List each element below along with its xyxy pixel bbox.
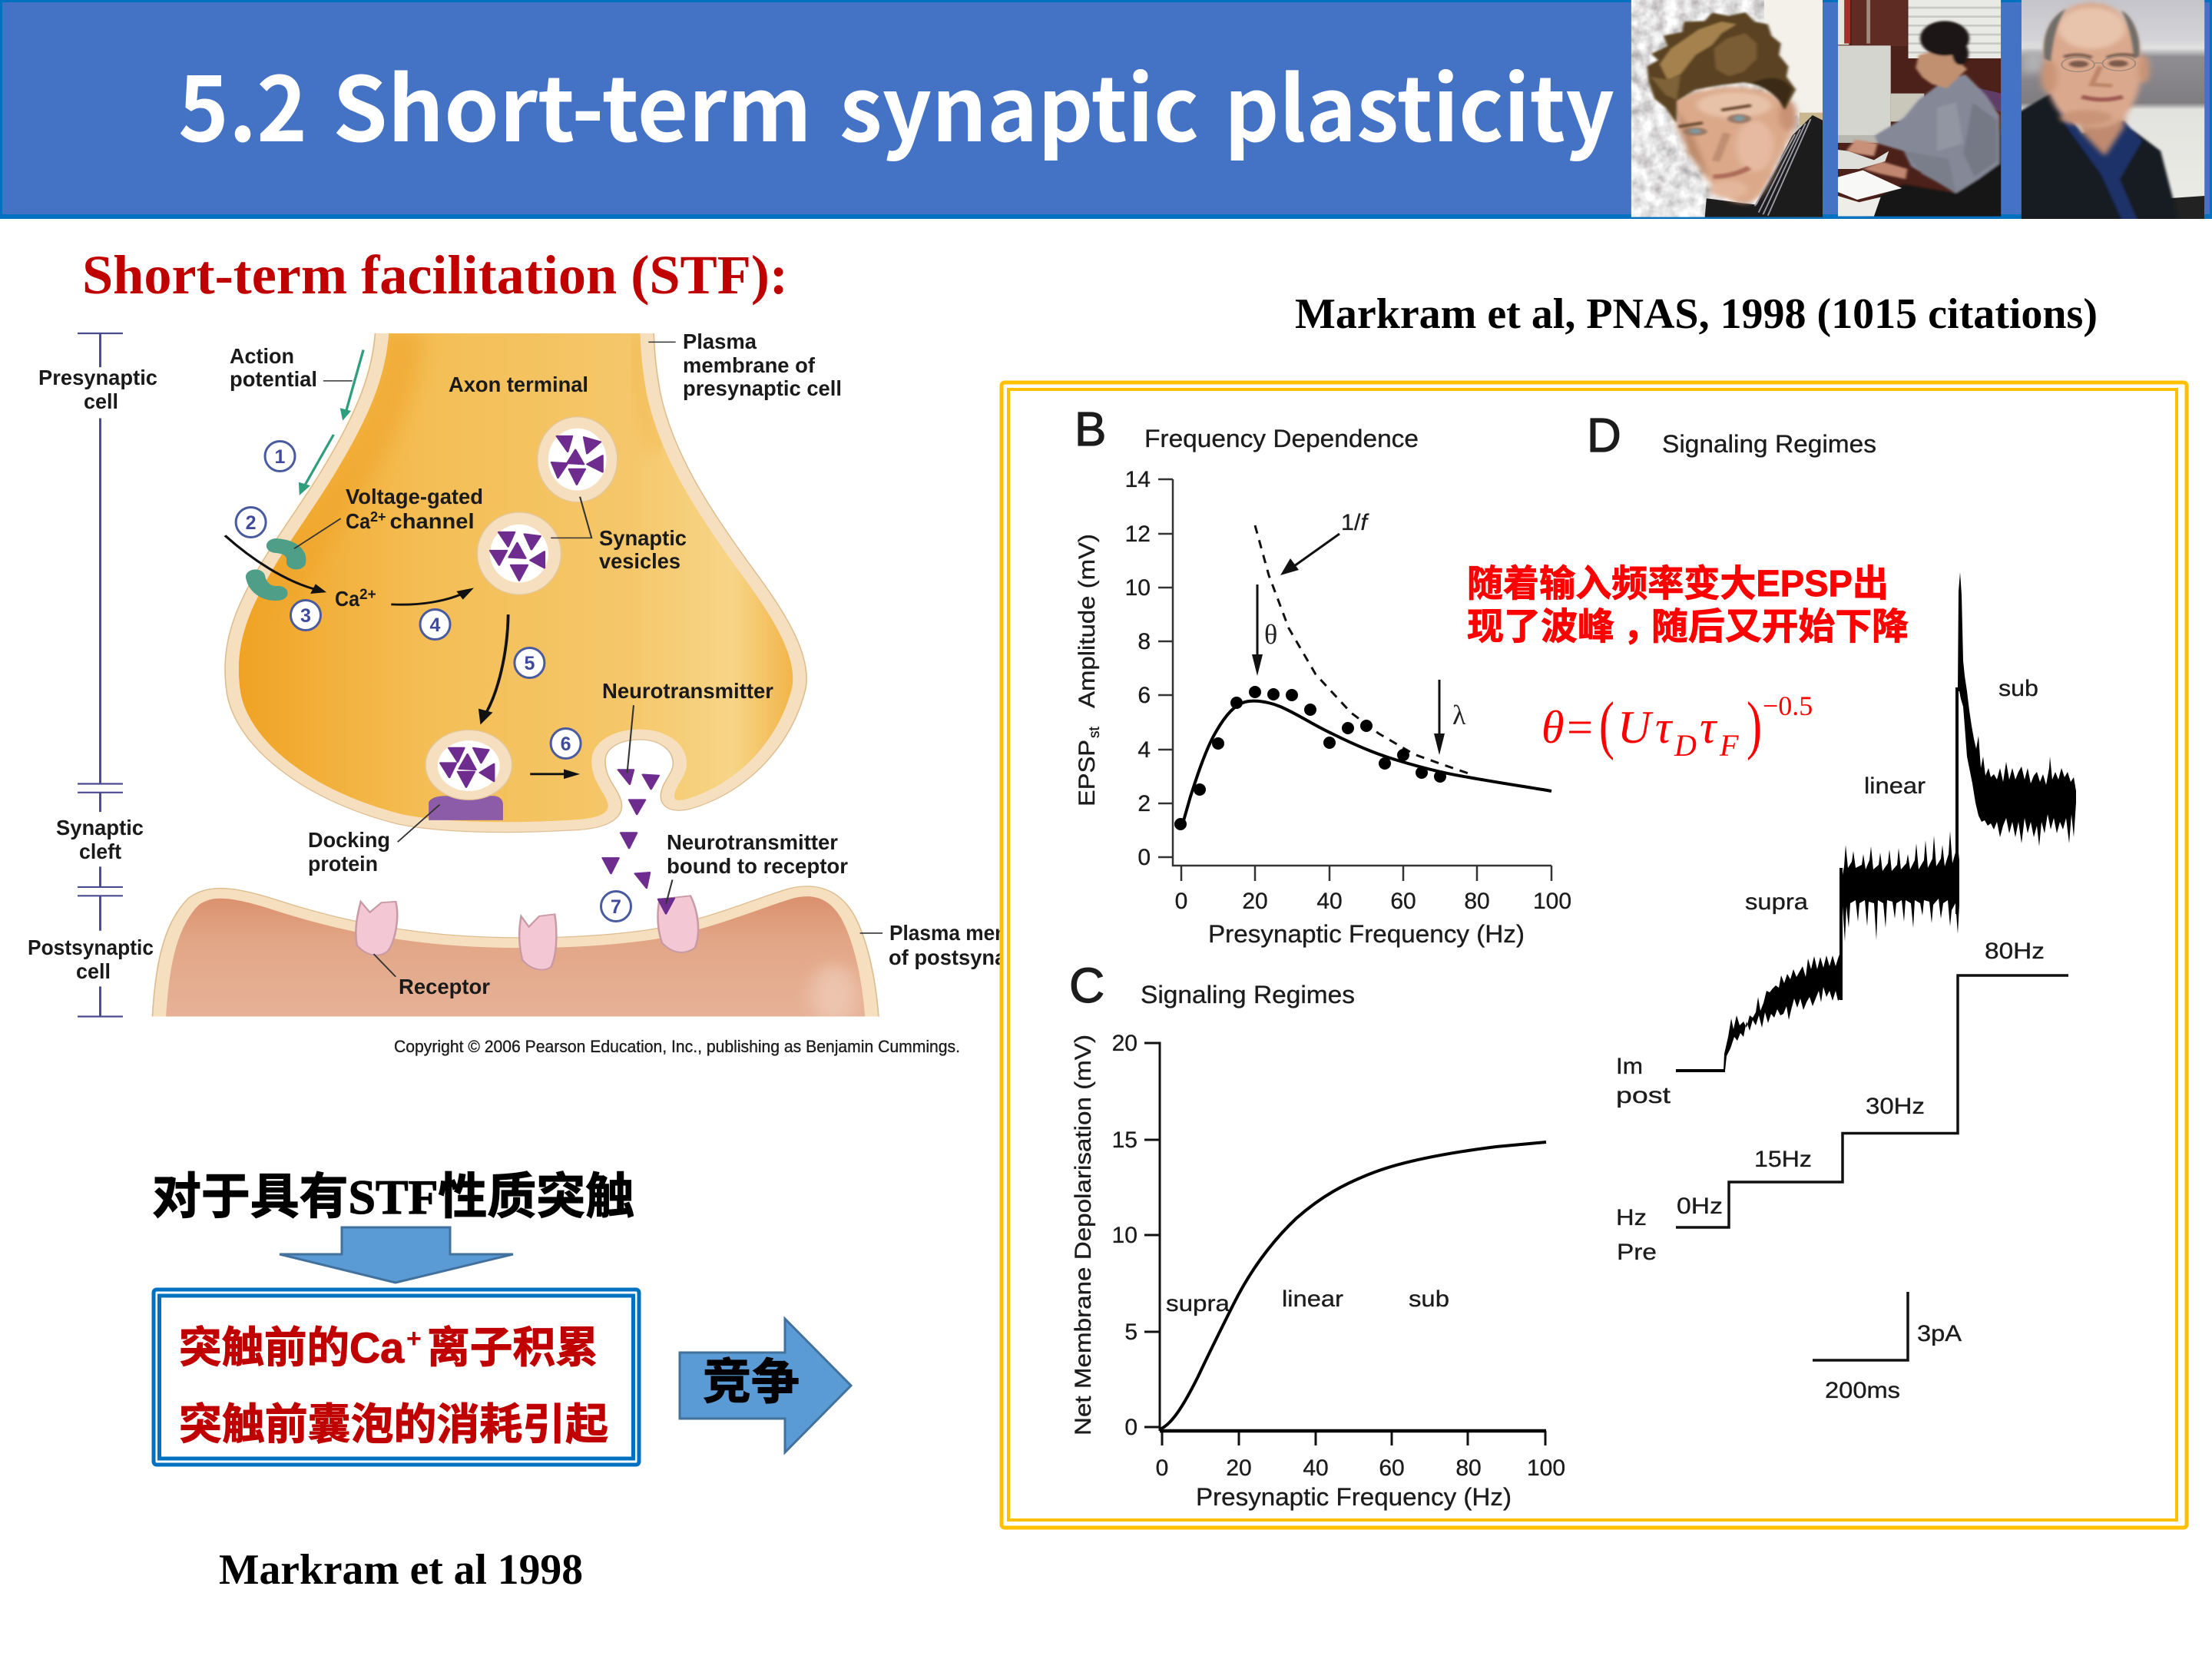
formula: D [1674, 728, 1697, 763]
label: of postsynaptic cell: of postsynaptic cell [889, 945, 1084, 969]
chart C: signaling regimes [1069, 958, 1565, 1511]
chart title: Signaling Regimes [1141, 981, 1355, 1008]
trace labels: Hz [1616, 1205, 1647, 1230]
trace labels [1616, 1054, 1671, 1265]
lambda label: λ [1452, 700, 1466, 730]
y tick labels: 8 [1137, 629, 1151, 654]
y tick labels [1125, 467, 1151, 870]
label: action: Action [230, 344, 294, 368]
label: postsynaptic: Postsynaptic [28, 935, 154, 959]
regime labels: sub [1998, 676, 2038, 701]
regime labels: linear [1282, 1286, 1343, 1312]
label: synaptic: Synaptic [599, 526, 687, 550]
text: vesicle depletion: 突触前囊泡的消耗引起 [179, 1400, 608, 1449]
photo: man with brown hair [1631, 0, 1826, 220]
y tick labels: 5 [1124, 1320, 1137, 1345]
frequency labels [1677, 939, 2045, 1219]
label: plasma: Plasma [683, 329, 757, 353]
x tick labels: 40 [1316, 889, 1343, 914]
regime labels: sub [1409, 1286, 1449, 1312]
title: plasticity [1224, 38, 1614, 167]
formula: = [1567, 702, 1593, 753]
process arrows [225, 535, 566, 774]
x tick labels: 80 [1455, 1455, 1482, 1481]
label: neurotransmitter: Neurotransmitter [667, 830, 838, 854]
label: vesicles: vesicles [599, 549, 680, 573]
title: synaptic [839, 38, 1199, 167]
step markers: 7 [611, 896, 621, 918]
receptors [356, 896, 698, 970]
x tick labels: 0 [1156, 1455, 1168, 1481]
text: calcium accumulation [179, 1323, 598, 1372]
formula: −0.5 [1763, 690, 1813, 721]
formula: τ [1700, 702, 1718, 753]
x tick labels: 60 [1379, 1455, 1405, 1481]
title: Short-term [333, 38, 812, 167]
chart D: signaling regimes traces [1587, 409, 2076, 1403]
label: bound to receptor: bound to receptor [667, 854, 848, 878]
text: calcium accumulation: 离子积累 [427, 1323, 598, 1372]
x tick labels: 20 [1242, 889, 1268, 914]
arrow: 1/f [1280, 534, 1339, 575]
y tick labels: 0 [1124, 1415, 1137, 1440]
frequency labels: 30Hz [1866, 1094, 1925, 1119]
y tick labels: 6 [1137, 683, 1151, 708]
1/f dashed curve [1255, 525, 1469, 773]
step markers [236, 441, 631, 922]
heading: STF synapse statement: 对于具有STF性质突触 [152, 1170, 634, 1224]
copyright: Copyright © 2006 Pearson Education, Inc., publishing as Benjamin Cummings. [394, 1037, 960, 1056]
frequency labels: 0Hz [1677, 1194, 1723, 1219]
panel: yellow figure frame [1002, 382, 2187, 1528]
leader lines [294, 342, 882, 977]
y tick labels: 4 [1137, 737, 1151, 763]
portrait photos [1631, 0, 2204, 223]
step markers: 3 [300, 605, 311, 627]
panel letter C: C [1069, 958, 1104, 1013]
data points [1174, 686, 1446, 830]
arrow: lambda [1434, 680, 1445, 755]
label: Ca channel: channel [390, 509, 475, 533]
trace labels: Im [1616, 1054, 1643, 1079]
calcium channels [256, 545, 296, 593]
formula: τ [1655, 702, 1674, 753]
red annotation text [1467, 564, 1909, 647]
x tick labels: 20 [1226, 1455, 1252, 1481]
panel letter B: B [1075, 403, 1106, 456]
label: docking: Docking [308, 828, 390, 852]
formula: θ [1541, 702, 1564, 753]
x axis line [1160, 1429, 1546, 1432]
label: neurotransmitter: Neurotransmitter [602, 679, 773, 703]
scale bar: 200ms [1825, 1378, 1900, 1403]
formula: ) [1747, 688, 1762, 761]
label: Ca channel: 2+ [370, 509, 386, 525]
citation heading: Markram et al, PNAS, 1998 (1015 citations) [1295, 290, 2098, 338]
competition label: 竞争 [703, 1356, 800, 1409]
formula [1541, 688, 1813, 763]
step markers: 6 [561, 733, 571, 755]
step markers: 4 [430, 614, 441, 636]
axes and ticks [1158, 479, 1551, 881]
panel letter D: D [1587, 409, 1621, 462]
red annotation text: 随着输入频率变大EPSP出 [1467, 564, 1889, 604]
chart title: Frequency Dependence [1144, 425, 1419, 452]
x tick labels: 60 [1390, 889, 1416, 914]
label: plasma membrane: Plasma membrane [889, 921, 1068, 945]
synaptic vesicles [426, 417, 618, 800]
docking protein [429, 796, 503, 820]
arrow: down to box [280, 1227, 513, 1283]
red annotation text: ， [1623, 607, 1660, 647]
label: presynaptic cell: Presynaptic [38, 366, 157, 389]
formula: U [1618, 702, 1654, 753]
label: cleft: cleft [79, 839, 121, 863]
y axis title: Amplitude (mV) [1075, 534, 1100, 708]
y tick labels: 20 [1112, 1031, 1137, 1056]
axes and ticks [1144, 1043, 1545, 1445]
label: voltage-gated: Voltage-gated [346, 485, 483, 508]
label: protein: protein [308, 852, 378, 876]
y axis title: Net Membrane Depolarisation (mV) [1071, 1035, 1096, 1435]
arrow: theta [1252, 584, 1263, 676]
photo: smiling man in glasses [2015, 0, 2204, 223]
label: receptor: Receptor [399, 975, 490, 998]
y tick labels: 0 [1137, 845, 1151, 870]
text: calcium accumulation: 突触前的Ca [179, 1323, 405, 1372]
y axis title [1075, 534, 1103, 806]
title [178, 38, 1614, 167]
postsynaptic cell [152, 886, 879, 1017]
step markers: 5 [524, 653, 535, 674]
label: presynaptic cell: presynaptic cell [683, 376, 842, 400]
chart B: frequency dependence [1075, 403, 1571, 948]
red annotation text: 随后又开始下降 [1651, 607, 1909, 647]
label: synaptic: Synaptic [56, 816, 144, 839]
label: Ca channel: Ca [346, 509, 370, 533]
panel: mechanism box [154, 1290, 639, 1465]
y tick labels: 10 [1112, 1223, 1137, 1248]
arrow: competition [680, 1319, 851, 1452]
header banner [0, 0, 2212, 219]
step markers: 1 [275, 446, 286, 468]
neurotransmitter molecules [440, 436, 674, 914]
y tick labels: 10 [1125, 575, 1151, 601]
frequency labels: 80Hz [1985, 939, 2045, 964]
1/f label: 1/f [1341, 510, 1369, 535]
trace labels: Pre [1617, 1240, 1657, 1265]
regime labels [1745, 676, 2038, 915]
theta label: θ [1264, 619, 1277, 650]
y tick labels: 12 [1125, 522, 1151, 547]
y axis title: EPSP [1075, 740, 1100, 806]
x axis title: Presynaptic Frequency (Hz) [1196, 1483, 1512, 1511]
x axis title: Presynaptic Frequency (Hz) [1208, 920, 1525, 948]
label: cell: cell [76, 959, 111, 983]
panel: synapse diagram [28, 325, 1084, 1056]
chart title: Signaling Regimes [1662, 430, 1876, 458]
regime labels: supra [1745, 889, 1808, 915]
scale bar: 3pA [1917, 1321, 1962, 1346]
x tick labels [1175, 889, 1571, 914]
label: calcium: 2+ [359, 587, 376, 603]
regime labels: linear [1864, 773, 1926, 799]
x tick labels: 100 [1527, 1455, 1565, 1481]
citation footer: Markram et al 1998 [219, 1546, 583, 1594]
synapse artwork [78, 325, 882, 1042]
y tick labels: 15 [1112, 1128, 1137, 1153]
presynaptic step trace [1676, 975, 2068, 1227]
y axis title: st [1087, 727, 1103, 738]
photo: man at computer [1838, 0, 2005, 220]
heading: short-term facilitation: Short-term facilitation (STF): [82, 244, 788, 306]
title: 5.2 [178, 38, 307, 167]
label: cell: cell [84, 389, 118, 413]
y tick labels: 2 [1137, 791, 1151, 816]
formula: F [1719, 728, 1739, 763]
action potential arrows [305, 349, 363, 485]
label: potential: potential [230, 367, 317, 391]
trace labels: post [1616, 1083, 1671, 1108]
x tick labels: 100 [1533, 889, 1571, 914]
x tick labels: 80 [1464, 889, 1490, 914]
label: axon terminal: Axon terminal [449, 373, 588, 396]
text: calcium accumulation: + [406, 1324, 422, 1353]
scale bars [78, 333, 123, 1016]
regime labels: supra [1166, 1291, 1230, 1316]
scale bar [1813, 1292, 1962, 1403]
y tick labels [1112, 1031, 1137, 1440]
label: calcium: Ca [335, 587, 359, 611]
frequency labels: 15Hz [1754, 1147, 1812, 1172]
y tick labels: 14 [1125, 467, 1151, 492]
depolarisation curve [1160, 1142, 1546, 1429]
step markers: 2 [246, 512, 257, 534]
formula: ( [1599, 688, 1614, 761]
x tick labels [1156, 1455, 1565, 1481]
red annotation text: 现了波峰 [1467, 607, 1614, 647]
postsynaptic current trace [1676, 572, 2076, 1072]
fit curve [1183, 701, 1551, 823]
label: membrane of: membrane of [683, 353, 816, 377]
regime labels [1166, 1286, 1449, 1316]
presynaptic terminal [232, 325, 800, 827]
x tick labels: 0 [1175, 889, 1187, 914]
x tick labels: 40 [1303, 1455, 1329, 1481]
